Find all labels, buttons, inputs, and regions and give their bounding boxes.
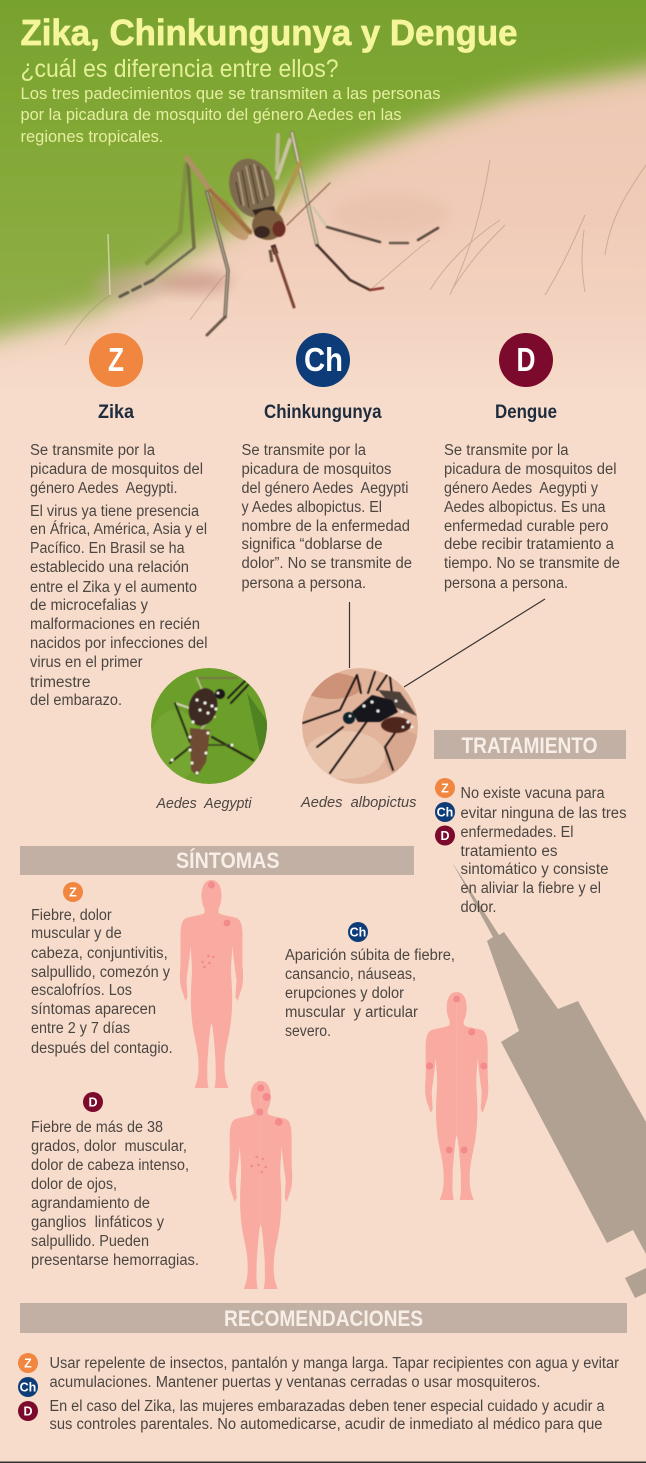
text: Chinkungunya description: y Aedes albopictus. El [242,499,382,516]
text: treatment: en aliviar la fiebre y el [460,880,601,897]
text: Dengue symptoms: Fiebre de más de 38 [31,1119,163,1136]
badges: treatment: Ch [437,806,453,820]
text: recommendations: sus controles parentales. No automedicarse, acudir de inmediato al médico para que [50,1416,602,1433]
icon: Zika badge: Z [108,341,124,378]
heading bar: Recomendaciones: RECOMENDACIONES [224,1306,423,1331]
text: Zika description: entre el Zika y el aumento [30,579,197,596]
hero photo: mosquito on skin [0,0,646,400]
text: Zika symptoms: muscular y de [31,925,122,942]
text: Zika description: malformaciones en recién [30,616,200,633]
text: Dengue description: picadura de mosquitos del [444,461,616,478]
text: Zika symptoms: salpullido, comezón y [31,964,170,981]
text: Dengue symptoms: presentarse hemorragias. [31,1252,199,1269]
text: Chinkungunya description: persona a persona. [242,575,366,592]
intro text: por la picadura de mosquito del género Aedes en las [20,106,402,124]
text: Dengue symptoms: dolor de ojos, [31,1176,117,1193]
text: Chinkungunya description [242,442,412,592]
badges: treatment: D [440,829,450,843]
text: treatment: dolor. [460,899,496,916]
skin hairs [65,160,646,345]
icon: Dengue badge: D [516,341,536,378]
heading: Chinkungunya: Chinkungunya [264,402,382,423]
text: Zika description: establecido una relación [30,559,189,576]
icon: syringe [452,862,646,1298]
text: Zika symptoms: Fiebre, dolor [31,907,112,924]
text: Zika symptoms: cabeza, conjuntivitis, [31,945,168,962]
badges: recommendations: Z [24,1356,32,1370]
badge: Chinkungunya symptoms [348,922,368,942]
connector lines to Aedes albopictus [350,599,545,687]
title: Zika, Chinkungunya y Dengue [20,12,518,53]
text: Chinkungunya description: nombre de la enfermedad [242,518,410,535]
text: Dengue description: tiempo. No se transmite de [444,555,620,572]
text: Dengue description: género Aedes Aegypti y [444,480,598,497]
text: Zika description: El virus ya tiene presencia [30,503,199,520]
text: recommendations: acumulaciones. Mantener puertas y ventanas cerradas o usar mosquiteros. [50,1374,540,1391]
text: Zika description: nacidos por infecciones del [30,635,208,652]
badge: Dengue symptoms [83,1092,103,1112]
text: recommendations: En el caso del Zika, las mujeres embarazadas deben tener especial cuidado y acudir a [50,1398,605,1415]
text: treatment [460,785,627,916]
text: Zika description: en África, América, Asia y el [30,521,207,538]
text: Zika description: Pacífico. En Brasil se ha [30,540,185,557]
text: Dengue symptoms: salpullido. Pueden [31,1233,149,1250]
badge: Chinkungunya symptoms: Ch [350,926,366,940]
text: Dengue symptoms: grados, dolor muscular, [31,1138,187,1155]
caption: Aedes Aegypti: Aedes Aegypti [156,796,252,812]
photo: Aedes Aegypti [150,668,268,784]
heading bar: Recomendaciones [20,1303,627,1333]
text: treatment: evitar ninguna de las tres [460,805,627,822]
text: Dengue symptoms: ganglios linfáticos y [31,1214,164,1231]
text: Dengue description: enfermedad curable pero [444,518,608,535]
badge: Zika symptoms: Z [69,886,77,900]
text: Zika symptoms: escalofríos. Los [31,982,132,999]
text: treatment: No existe vacuna para [460,785,605,802]
text: Zika description: de microcefalias y [30,597,148,614]
text: Zika description: Se transmite por la [30,442,155,459]
text: Zika symptoms: después del contagio. [31,1040,173,1057]
text: Zika symptoms: síntomas aparecen [31,1001,156,1018]
photo: Aedes albopictus [302,668,425,784]
badges: treatment: Z [441,782,449,796]
mosquito [117,133,438,335]
text: Chinkungunya symptoms: cansancio, náuseas, [285,966,416,983]
text: treatment: sintomático y consiste [460,861,608,878]
text: Dengue description: persona a persona. [444,575,568,592]
text: Zika symptoms: entre 2 y 7 días [31,1020,130,1037]
text: Chinkungunya symptoms: Aparición súbita de fiebre, [285,947,455,964]
icon: Zika badge [89,333,143,387]
text: Dengue description: Se transmite por la [444,442,569,459]
text: Zika description: del embarazo. [30,692,122,709]
text: Chinkungunya symptoms: severo. [285,1023,331,1040]
heading bar: Síntomas [20,846,414,875]
icon: Chinkungunya badge: Ch [304,341,343,378]
text: Zika description: picadura de mosquitos del [30,461,203,478]
intro text: Los tres padecimientos que se transmiten a las personas [20,85,440,103]
badge: Dengue symptoms: D [88,1096,98,1110]
intro text [20,85,440,146]
subtitle: ¿cuál es diferencia entre ellos? [20,55,338,83]
intro text: regiones tropicales. [20,128,164,146]
badges: recommendations [18,1353,38,1421]
body figure: Dengue [229,1081,292,1289]
text: Dengue symptoms: dolor de cabeza intenso, [31,1157,189,1174]
text: Chinkungunya symptoms: erupciones y dolor [285,985,404,1002]
text: Zika description: género Aedes Aegypti. [30,480,178,497]
text: Chinkungunya description: del género Aedes Aegypti [242,480,408,497]
body figure: Chinkungunya [425,992,488,1200]
text: Chinkungunya description: significa “doblarse de [242,536,382,553]
text: Dengue description [444,442,620,592]
badges: recommendations: Ch [20,1380,36,1394]
body figure: Zika [180,880,243,1088]
bottom rule [0,1462,646,1463]
text: Dengue description: Aedes albopictus. Es una [444,499,606,516]
text: recommendations: Usar repelente de insectos, pantalón y manga larga. Tapar recipientes con agua y evitar [50,1355,619,1372]
caption: Aedes albopictus: Aedes albopictus [300,795,416,811]
text: Dengue symptoms: agrandamiento de [31,1195,150,1212]
heading bar: Síntomas: SÍNTOMAS [176,848,280,873]
heading bar: Tratamiento: TRATAMIENTO [462,733,598,758]
text: Zika symptoms [31,907,173,1057]
heading: Zika: Zika [98,402,134,423]
text: Zika description: trimestre [30,674,90,691]
text: Dengue description: debe recibir tratamiento a [444,536,614,553]
badge: Zika symptoms [63,882,83,902]
text: Chinkungunya description: Se transmite por la [242,442,366,459]
text: Chinkungunya description: picadura de mosquitos [242,461,392,478]
icon: Dengue badge [499,333,553,387]
icon: Chinkungunya badge [296,333,350,387]
text: treatment: tratamiento es [460,843,558,860]
text: Zika description [30,442,208,709]
text: Dengue symptoms [31,1119,199,1269]
text: Zika description: virus en el primer [30,654,142,671]
badges: treatment [435,778,455,846]
text: Chinkungunya symptoms: muscular y articular [285,1004,418,1021]
heading: Dengue: Dengue [495,402,557,423]
text: treatment: enfermedades. El [460,824,574,841]
text: recommendations [50,1355,619,1433]
text: Chinkungunya symptoms [285,947,455,1040]
text: Chinkungunya description: dolor”. No se transmite de [242,555,412,572]
badges: recommendations: D [23,1404,33,1418]
